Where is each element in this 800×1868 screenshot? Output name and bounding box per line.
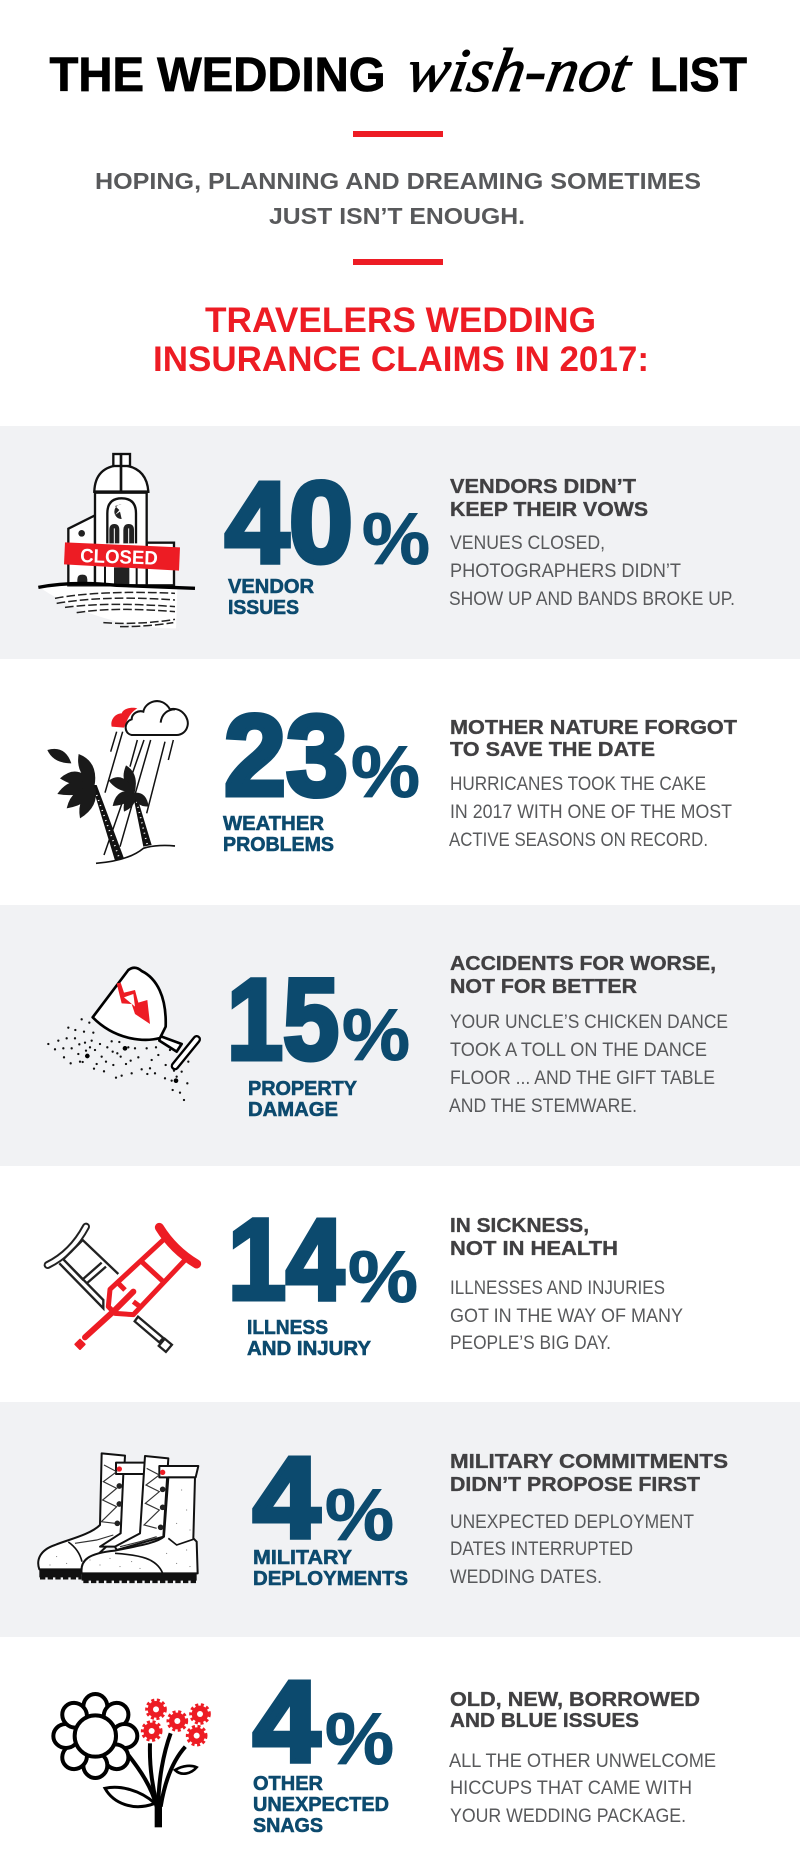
stat: 14 percent: % <box>348 1237 418 1318</box>
text: vendors <box>449 476 735 610</box>
stat: 4 percent military: MILITARY <box>253 1547 353 1569</box>
stat: 40 percent: VENDOR <box>228 576 315 598</box>
stat: 40 percent: ISSUES <box>228 597 299 619</box>
stat: 4 percent military <box>253 1434 408 1590</box>
text: other issues: YOUR WEDDING PACKAGE. <box>450 1805 686 1827</box>
stat: 4 percent military: DEPLOYMENTS <box>253 1568 408 1590</box>
panel: other unexpected snags <box>0 1637 800 1868</box>
text: other issues: HICCUPS THAT CAME WITH <box>450 1777 692 1799</box>
text: accidents: AND THE STEMWARE. <box>449 1095 637 1117</box>
text: military: WEDDING DATES. <box>450 1566 602 1588</box>
text: accidents <box>449 953 728 1117</box>
closed banner <box>64 542 180 571</box>
stat: 23 percent: 23 <box>224 692 348 820</box>
text: weather: IN 2017 WITH ONE OF THE MOST <box>450 801 732 823</box>
text: weather: TO SAVE THE DATE <box>450 739 655 761</box>
stat: 4 percent other: 4 <box>253 1658 320 1786</box>
subtitle: JUST ISN’T ENOUGH. <box>269 203 525 229</box>
text: weather: ACTIVE SEASONS ON RECORD. <box>449 829 708 851</box>
stat: 14 percent: ILLNESS <box>247 1317 328 1339</box>
panel: military deployments <box>0 1402 800 1637</box>
icon: military boots <box>38 1453 198 1582</box>
icon: broken wine glass <box>48 968 197 1100</box>
text: sickness: IN SICKNESS, <box>450 1215 589 1237</box>
text: military: DATES INTERRUPTED <box>450 1538 633 1560</box>
stat: 15 percent: % <box>342 995 410 1076</box>
header <box>50 35 747 379</box>
title: THE WEDDING <box>50 49 386 102</box>
subtitle <box>95 168 701 229</box>
title <box>50 35 747 105</box>
stat: 15 percent: DAMAGE <box>248 1099 338 1121</box>
text: other issues: ALL THE OTHER UNWELCOME <box>449 1750 716 1772</box>
stat: 14 percent: 14 <box>228 1196 344 1324</box>
text: accidents: TOOK A TOLL ON THE DANCE <box>450 1039 707 1061</box>
stat: 15 percent <box>227 956 410 1121</box>
text: vendors: SHOW UP AND BANDS BROKE UP. <box>449 588 735 610</box>
stat: 14 percent <box>228 1196 418 1360</box>
text: sickness: ILLNESSES AND INJURIES <box>450 1277 665 1299</box>
stat: 23 percent: PROBLEMS <box>223 834 334 856</box>
stat: 4 percent other <box>253 1658 394 1837</box>
title: LIST <box>650 49 747 102</box>
text: weather: MOTHER NATURE FORGOT <box>450 717 737 739</box>
icon: flowers <box>53 1694 209 1827</box>
stat: 40 percent: 40 <box>225 459 353 587</box>
stat: 23 percent <box>223 692 420 856</box>
stat: 23 percent: WEATHER <box>223 813 325 835</box>
stat: 4 percent other: SNAGS <box>253 1815 323 1837</box>
text: accidents: YOUR UNCLE’S CHICKEN DANCE <box>450 1011 728 1033</box>
stat: 15 percent: 15 <box>227 956 339 1084</box>
text: other issues: OLD, NEW, BORROWED <box>450 1689 700 1711</box>
stat: 40 percent: % <box>362 499 430 580</box>
icon: crutches <box>48 1227 197 1352</box>
text: accidents: ACCIDENTS FOR WORSE, <box>450 953 716 975</box>
text: other issues: AND BLUE ISSUES <box>450 1710 639 1732</box>
panel: property damage <box>0 905 800 1166</box>
section heading: TRAVELERS WEDDING <box>205 301 596 340</box>
stat: 15 percent: PROPERTY <box>248 1078 358 1100</box>
text: sickness: PEOPLE’S BIG DAY. <box>450 1332 611 1354</box>
text: weather <box>449 717 737 851</box>
text: accidents: FLOOR ... AND THE GIFT TABLE <box>450 1067 715 1089</box>
stat: 14 percent: AND INJURY <box>247 1338 372 1360</box>
text: vendors: VENDORS DIDN’T <box>450 476 636 498</box>
text: vendors: VENUES CLOSED, <box>450 532 605 554</box>
text: vendors: PHOTOGRAPHERS DIDN’T <box>450 560 681 582</box>
icon: closed church <box>38 454 195 628</box>
text: military: MILITARY COMMITMENTS <box>450 1451 728 1473</box>
text: other issues <box>449 1689 716 1827</box>
section heading <box>153 301 649 379</box>
stat: 4 percent other: OTHER <box>253 1773 324 1795</box>
icon: storm and palm trees <box>47 701 188 863</box>
text: military <box>450 1451 728 1588</box>
text: military: DIDN’T PROPOSE FIRST <box>450 1474 700 1496</box>
panel: illness and injury <box>0 1166 800 1402</box>
subtitle: HOPING, PLANNING AND DREAMING SOMETIMES <box>95 168 701 194</box>
section heading: INSURANCE CLAIMS IN 2017: <box>153 340 649 379</box>
text: sickness <box>450 1215 683 1354</box>
closed banner: CLOSED <box>80 546 158 570</box>
stat: 4 percent other: % <box>325 1699 394 1780</box>
panel: vendor issues <box>0 426 800 659</box>
text: vendors: KEEP THEIR VOWS <box>450 499 648 521</box>
stat: 4 percent other: UNEXPECTED <box>253 1794 389 1816</box>
stat: 4 percent military: % <box>325 1475 394 1556</box>
text: weather: HURRICANES TOOK THE CAKE <box>450 773 706 795</box>
title: wish-not <box>402 35 637 105</box>
stat: 4 percent military: 4 <box>253 1434 320 1562</box>
panel: weather problems <box>0 659 800 905</box>
text: military: UNEXPECTED DEPLOYMENT <box>450 1511 694 1533</box>
stat: 40 percent <box>225 459 430 619</box>
text: sickness: NOT IN HEALTH <box>450 1238 618 1260</box>
stat: 23 percent: % <box>351 732 420 813</box>
text: sickness: GOT IN THE WAY OF MANY <box>450 1305 683 1327</box>
text: accidents: NOT FOR BETTER <box>450 976 638 998</box>
